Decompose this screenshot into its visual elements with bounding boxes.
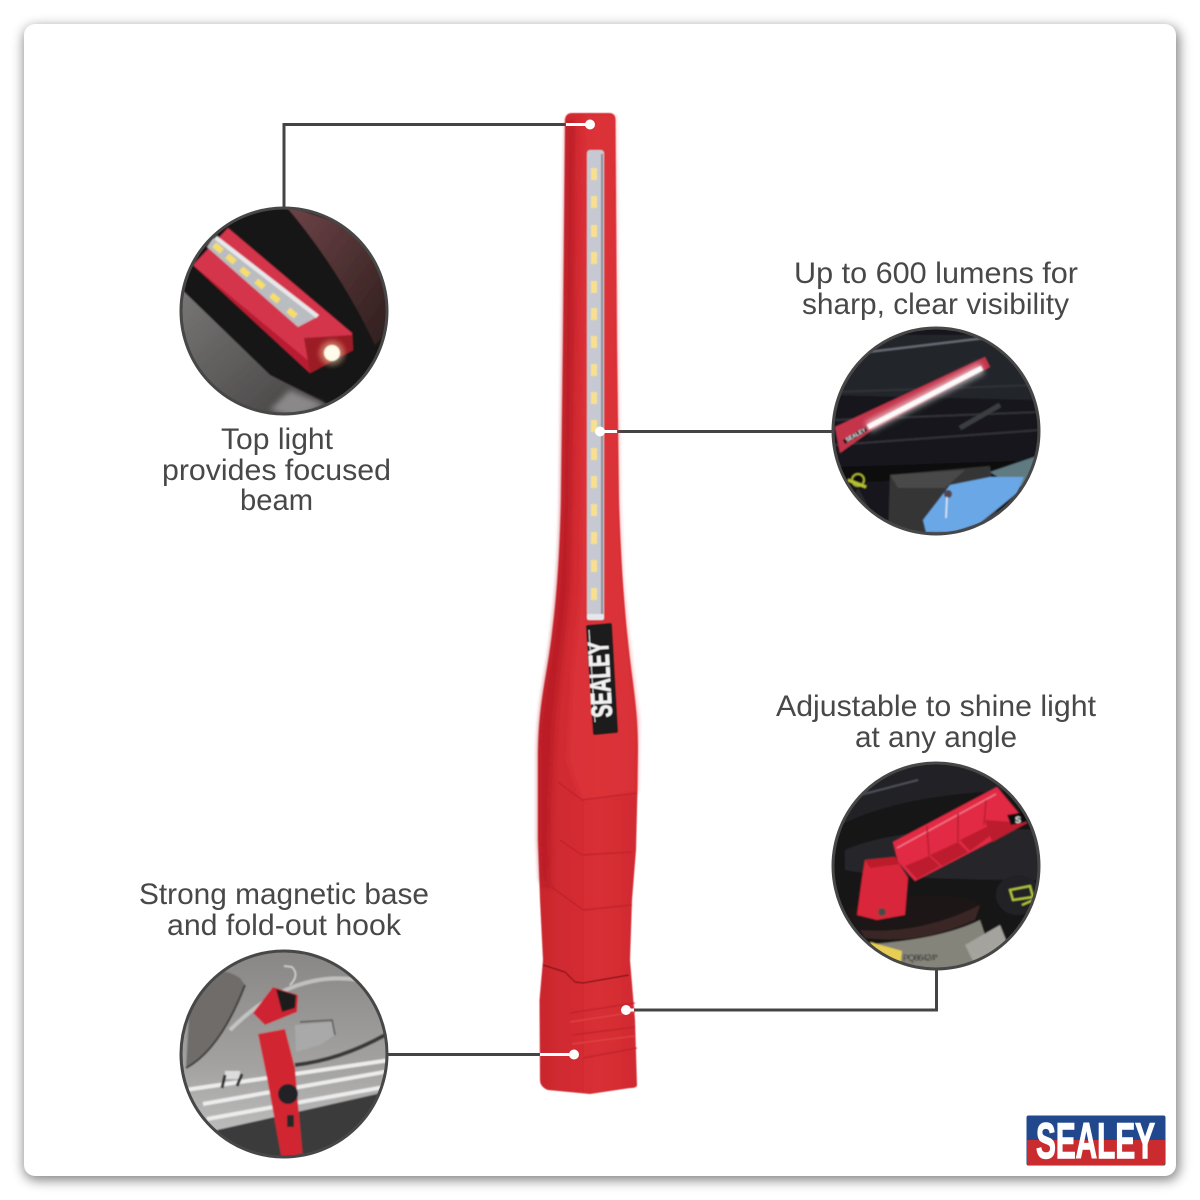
connector: top light	[284, 124, 568, 208]
product: inspection light	[538, 113, 638, 1094]
photo circle: lumens: SEALEY	[845, 427, 867, 444]
connector: adjustable	[634, 968, 936, 1010]
photo circle: adjustable: PQ86424*	[903, 952, 939, 963]
photo circle: lumens	[825, 320, 1045, 540]
left shaded facet	[538, 120, 575, 890]
connector: magnetic base	[388, 1053, 541, 1056]
badge	[583, 623, 619, 735]
caption: adjustable: Adjustable to shine light	[776, 690, 1097, 723]
caption: top light	[162, 423, 391, 517]
white pointer: lumens	[595, 426, 617, 436]
caption: magnetic base	[139, 878, 429, 942]
caption: top light: beam	[240, 484, 313, 517]
caption: lumens: sharp, clear visibility	[802, 288, 1069, 321]
caption: top light: provides focused	[162, 454, 391, 487]
photo circle: adjustable	[825, 755, 1045, 975]
caption: lumens	[794, 257, 1078, 321]
white pointer: adjustable	[621, 1005, 634, 1015]
facet highlight lines	[541, 782, 637, 1093]
photo circle: top light	[180, 206, 388, 416]
connector: lumens	[617, 430, 834, 433]
caption: adjustable	[776, 690, 1097, 754]
photo circle: magnetic base	[175, 945, 395, 1165]
base seam	[543, 965, 629, 983]
caption: adjustable: at any angle	[855, 721, 1017, 754]
caption: magnetic base: Strong magnetic base	[139, 878, 429, 911]
centre raised facet	[566, 116, 638, 800]
torch body	[538, 113, 638, 1094]
caption: magnetic base: and fold-out hook	[167, 909, 402, 942]
photo circle: adjustable: S	[1015, 815, 1021, 825]
caption: lumens: Up to 600 lumens for	[794, 257, 1078, 290]
badge: SEALEY	[583, 641, 619, 718]
white pointer: top light	[566, 120, 595, 130]
LED window	[587, 150, 604, 620]
caption: top light: Top light	[221, 423, 334, 456]
LED chips	[591, 168, 597, 600]
white pointer: magnetic base	[540, 1050, 579, 1060]
